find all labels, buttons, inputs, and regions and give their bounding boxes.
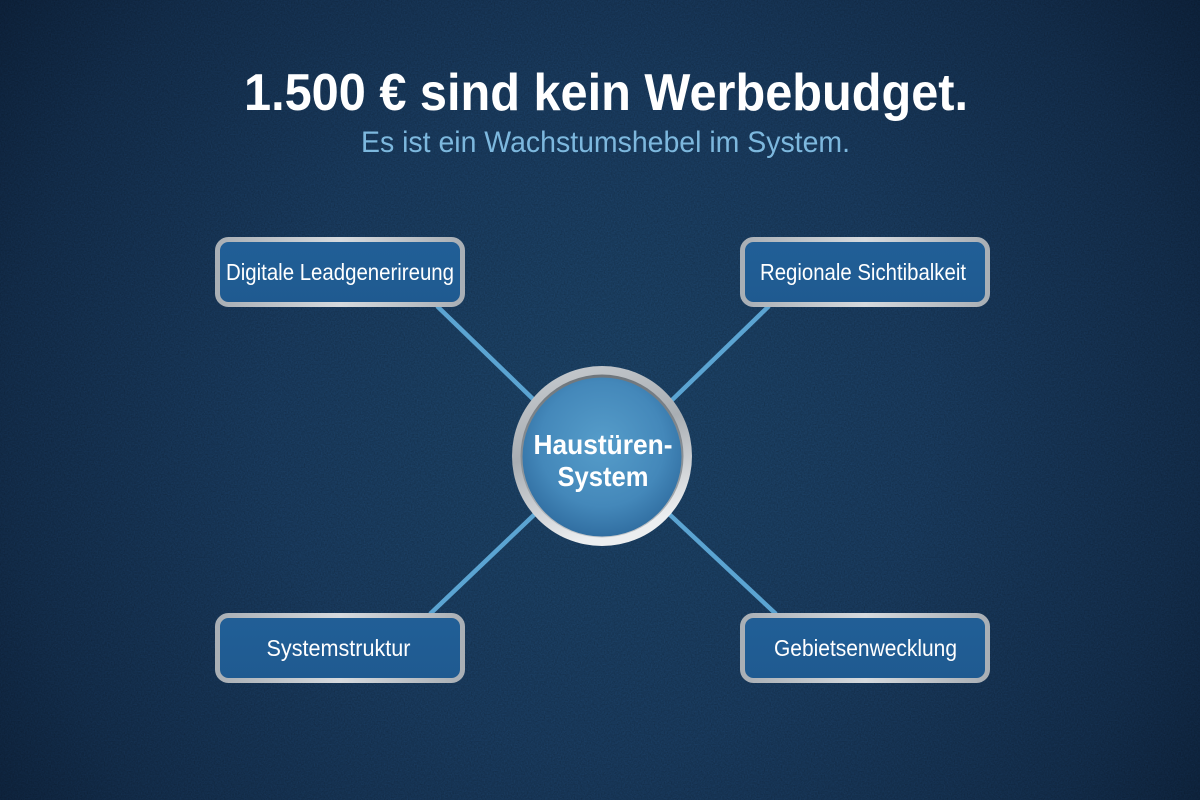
connector lines xyxy=(430,306,776,614)
center node: Haustüren-System: Haustüren- xyxy=(534,429,672,460)
box: Gebietsentwicklung: Gebietsenwecklung xyxy=(774,635,957,661)
box: Digitale Leadgenerierung: Digitale Leadgenerireung xyxy=(226,259,454,285)
box: Gebietsentwicklung xyxy=(742,616,988,680)
subtitle: Es ist ein Wachstumshebel im System. xyxy=(361,126,850,159)
box: Systemstruktur: Systemstruktur xyxy=(266,635,411,661)
title: 1.500 € sind kein Werbebudget. xyxy=(244,64,968,122)
box: Digitale Leadgenerierung xyxy=(218,240,462,304)
box: Regionale Sichtbarkeit: Regionale Sichtibalkeit xyxy=(760,259,967,285)
center node: Haustüren-System xyxy=(512,366,692,546)
box: Regionale Sichtbarkeit xyxy=(742,240,988,304)
center node: Haustüren-System: System xyxy=(558,461,648,492)
box: Systemstruktur xyxy=(218,616,462,680)
